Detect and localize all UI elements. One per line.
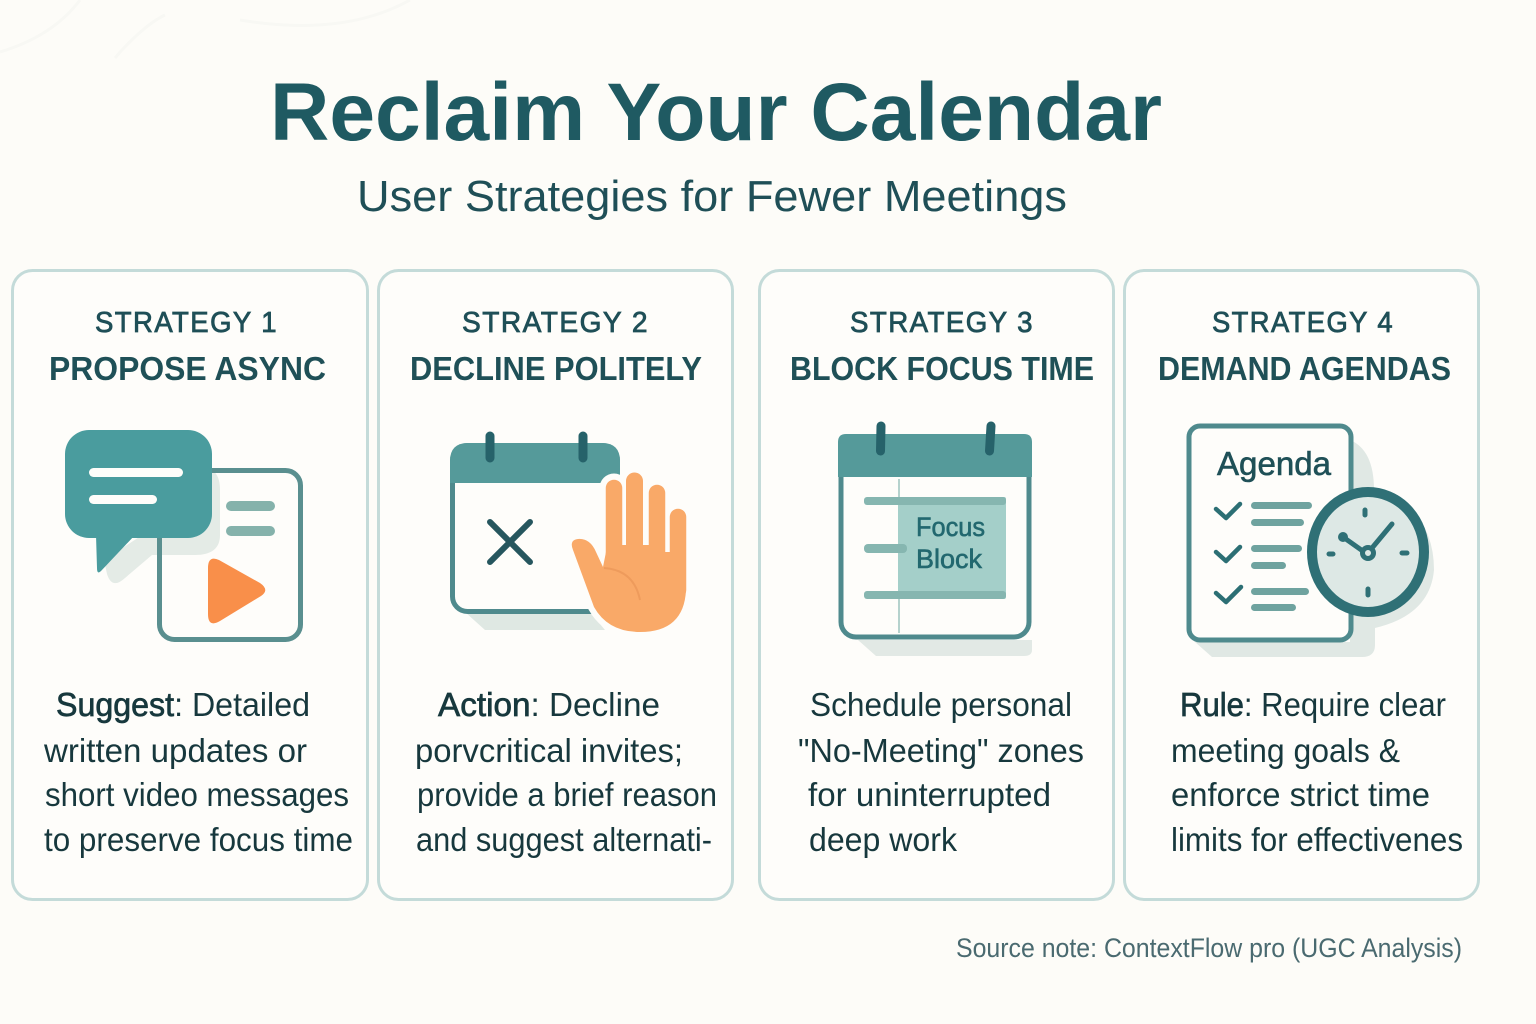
strategy 4 body text bbox=[1171, 686, 1463, 858]
strategy 3 body text: Schedule personal bbox=[810, 686, 1072, 723]
focus block label bbox=[916, 512, 985, 574]
strategy 2 heading: DECLINE POLITELY bbox=[410, 350, 702, 387]
strategy 1 heading: PROPOSE ASYNC bbox=[49, 350, 326, 387]
strategy 3 heading: BLOCK FOCUS TIME bbox=[790, 350, 1094, 387]
subtitle: User Strategies for Fewer Meetings bbox=[357, 172, 1067, 221]
title: Reclaim Your Calendar bbox=[270, 67, 1162, 158]
panel: strategy 1 bbox=[12, 270, 368, 900]
icon: calendar with focus block bbox=[838, 426, 1032, 656]
strategy 2 body text bbox=[415, 686, 717, 858]
strategy 4 heading: DEMAND AGENDAS bbox=[1158, 350, 1451, 387]
strategy 3 label: STRATEGY 3 bbox=[850, 307, 1034, 339]
strategy 4 body text: limits for effectivenes bbox=[1171, 821, 1463, 858]
strategy 2 body text: porvcritical invites; bbox=[415, 732, 683, 769]
strategy 1 body text: Suggest: Detailed bbox=[56, 686, 310, 723]
icon: chat bubble and video document bbox=[65, 430, 300, 640]
focus block label: Focus bbox=[916, 512, 985, 542]
source note: Source note: ContextFlow pro (UGC Analysis) bbox=[956, 933, 1462, 963]
strategy 3 body text: "No-Meeting" zones bbox=[798, 732, 1084, 769]
strategy 2 body text: Action: Decline bbox=[438, 686, 660, 723]
panel: strategy 4 bbox=[1124, 270, 1478, 900]
panel: strategy 3 bbox=[760, 270, 1114, 900]
strategy 2 label: STRATEGY 2 bbox=[462, 307, 649, 339]
agenda label: Agenda bbox=[1217, 445, 1332, 482]
strategy 1 body text: written updates or bbox=[43, 732, 307, 769]
strategy 1 body text: to preserve focus time bbox=[44, 821, 353, 858]
strategy 2 body text: and suggest alternati- bbox=[416, 821, 712, 858]
strategy 2 body text: provide a brief reason bbox=[417, 776, 717, 813]
strategy 4 label: STRATEGY 4 bbox=[1212, 307, 1394, 339]
panel: strategy 2 bbox=[378, 270, 732, 900]
focus block label: Block bbox=[916, 544, 982, 574]
strategy 1 body text bbox=[43, 686, 353, 858]
strategy 4 body text: enforce strict time bbox=[1171, 776, 1430, 813]
icon: agenda and clock bbox=[1189, 426, 1434, 657]
strategy 1 label: STRATEGY 1 bbox=[95, 307, 278, 339]
strategy 3 body text: for uninterrupted bbox=[808, 776, 1051, 813]
strategy 1 body text: short video messages bbox=[45, 776, 349, 813]
strategy 3 body text bbox=[798, 686, 1084, 858]
strategy 4 body text: Rule: Require clear bbox=[1180, 686, 1446, 723]
strategy 3 body text: deep work bbox=[809, 821, 957, 858]
icon: calendar with raised hand bbox=[450, 436, 686, 632]
strategy 4 body text: meeting goals & bbox=[1171, 732, 1400, 769]
